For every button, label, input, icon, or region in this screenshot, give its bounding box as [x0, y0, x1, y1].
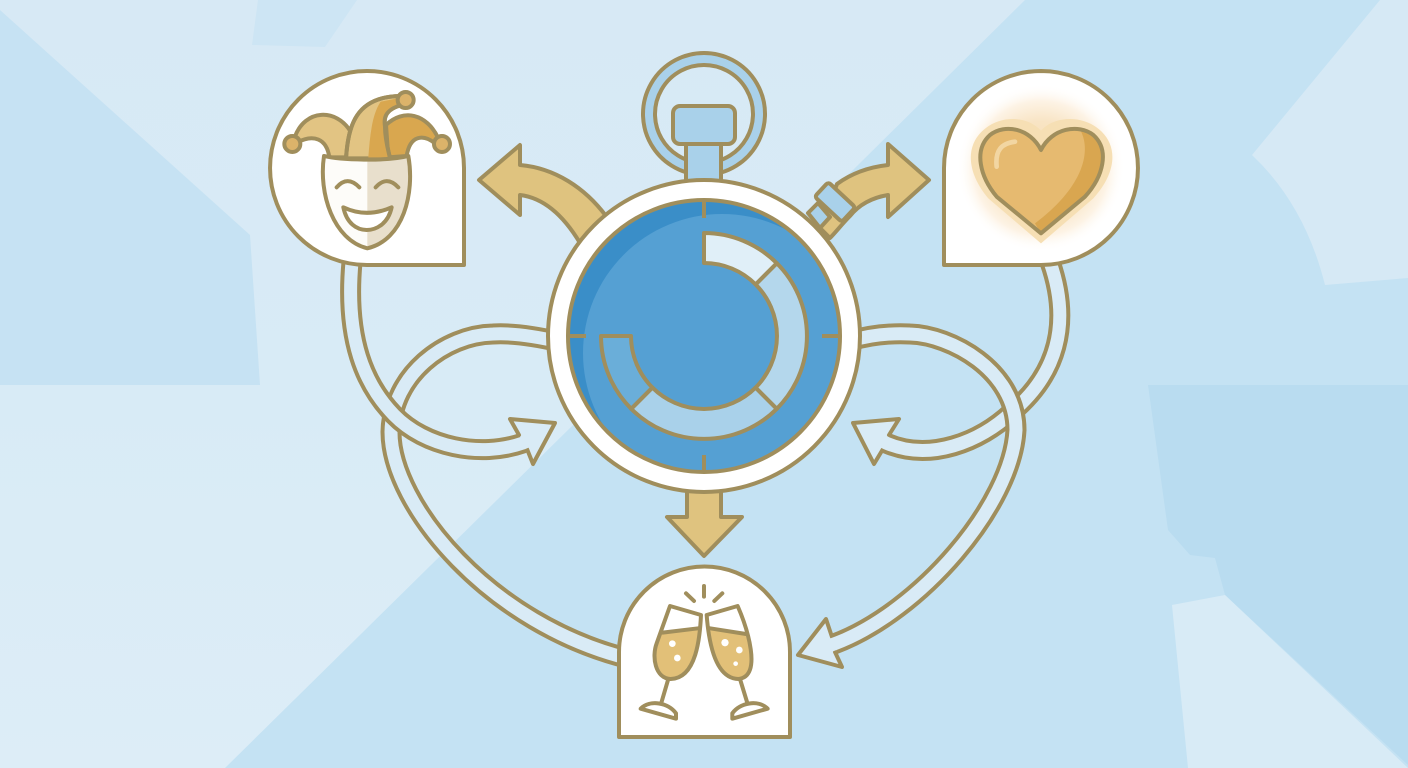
- stopwatch body: [548, 180, 861, 492]
- panel: jester: [270, 71, 464, 265]
- arrow: clock to jester, gold: [479, 145, 606, 243]
- jester hat: [284, 92, 450, 158]
- stopwatch crown: [643, 53, 765, 182]
- arrow: clock to champagne, left side: [391, 334, 630, 659]
- icon: jester mask: [284, 92, 450, 248]
- left glass: [641, 606, 701, 719]
- heart glow: [957, 84, 1125, 252]
- tick marks: [568, 200, 840, 473]
- arrow: clock to heart, gold: [808, 144, 929, 238]
- crown button: [673, 106, 735, 144]
- arrow: heart to clock, curved: [853, 262, 1060, 464]
- ring segments: [601, 233, 807, 439]
- panel: heart: [944, 71, 1138, 265]
- icon: heart: [971, 119, 1112, 243]
- white bezel: [548, 180, 860, 492]
- right glass: [707, 606, 768, 719]
- arrow: clock to champagne, right side: [798, 334, 1016, 667]
- arrow: jester to clock, curved: [351, 262, 555, 464]
- crown stem: [686, 144, 721, 182]
- dial: [568, 200, 840, 472]
- icon: champagne glasses: [641, 586, 768, 719]
- crown ring: [643, 53, 765, 175]
- mask face: [323, 156, 410, 248]
- arrow: clock to champagne, gold: [667, 490, 742, 556]
- clink sparks: [686, 586, 722, 601]
- panel: champagne: [619, 566, 790, 737]
